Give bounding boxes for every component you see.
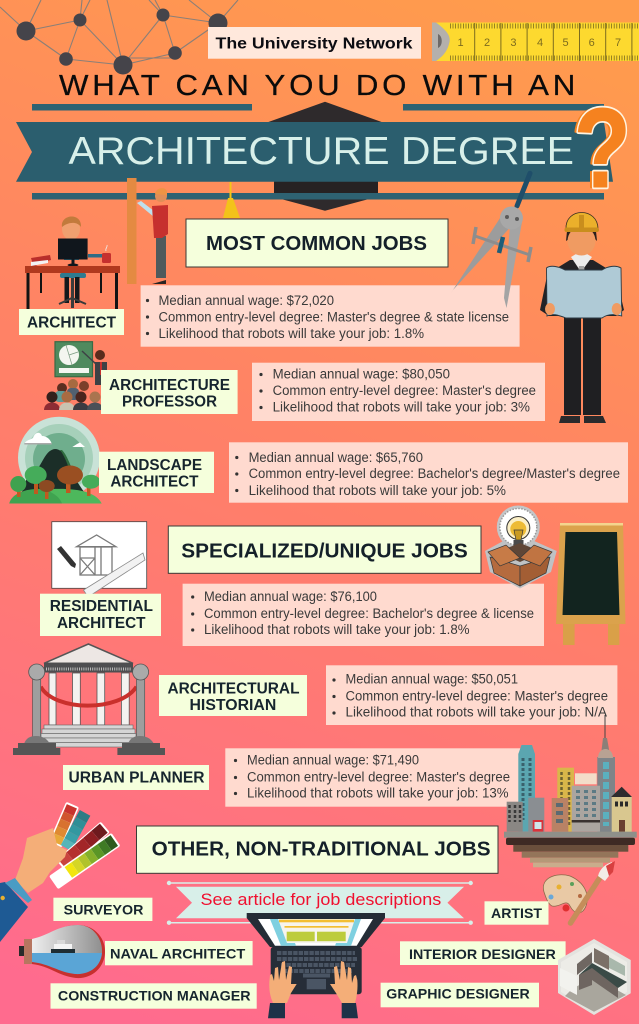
panel: landscape stats: Common entry-level degree: Bachelor's degree/Master's degree	[249, 466, 620, 481]
panel: historian stats: Common entry-level degree: Master's degree	[346, 688, 608, 703]
panel: urban planner stats: Likelihood that robots will take your job: 13%	[247, 785, 509, 800]
label: urban planner: URBAN PLANNER	[68, 770, 204, 787]
label: naval architect	[105, 941, 253, 965]
panel: architect stats	[141, 285, 520, 347]
label: architect: ARCHITECT	[27, 315, 117, 332]
icon: house drawing	[52, 522, 147, 597]
label: interior designer	[400, 941, 566, 965]
icon: measuring tape: 4	[537, 37, 543, 49]
panel: architect stats: Likelihood that robots will take your job: 1.8%	[158, 326, 424, 341]
label: architect	[19, 309, 124, 335]
label: architectural historian: HISTORIAN	[190, 697, 276, 714]
icon: measuring tape	[432, 22, 639, 61]
label: landscape architect: ARCHITECT	[110, 474, 199, 491]
panel: residential stats: Median annual wage: $76,100	[204, 589, 377, 604]
icon: measuring tape: 6	[589, 37, 595, 49]
section heading: most common jobs	[186, 219, 448, 267]
icon: chalkboard	[556, 523, 626, 645]
title banner: ARCHITECTURE DEGREE	[68, 130, 574, 173]
panel: urban planner stats	[225, 748, 520, 807]
panel: urban planner stats: Common entry-level degree: Master's degree	[247, 769, 510, 784]
icon: measuring tape: 5	[563, 37, 569, 49]
panel: professor stats	[252, 363, 545, 421]
panel: residential stats: Likelihood that robots will take your job: 1.8%	[204, 622, 470, 637]
icon: hand with colour swatches	[0, 802, 121, 942]
decorative bars	[32, 104, 604, 200]
icon: question mark: ?	[574, 84, 631, 211]
label: landscape architect	[99, 452, 214, 493]
label: architecture professor: PROFESSOR	[122, 394, 217, 411]
label: graphic designer: GRAPHIC DESIGNER	[386, 985, 530, 1001]
label: naval architect: NAVAL ARCHITECT	[110, 945, 246, 961]
label: construction manager: CONSTRUCTION MANAGER	[58, 988, 251, 1004]
icon: graduation cap	[260, 102, 390, 211]
title banner	[16, 122, 613, 182]
label: architectural historian	[159, 675, 307, 716]
label: surveyor: SURVEYOR	[64, 902, 143, 918]
label: residential architect	[40, 594, 161, 636]
icon: architect at desk	[25, 216, 120, 309]
brand label	[208, 27, 421, 59]
panel: urban planner stats: Median annual wage: $71,490	[247, 752, 419, 767]
icon: palette and brush	[543, 861, 615, 923]
panel: professor stats: Common entry-level degree: Master's degree	[273, 383, 536, 398]
section heading: most common jobs: MOST COMMON JOBS	[206, 233, 427, 255]
ribbon: article note	[167, 881, 473, 925]
panel: professor stats: Likelihood that robots will take your job: 3%	[273, 400, 530, 415]
icon: measuring tape: 7	[615, 37, 621, 49]
label: architectural historian: ARCHITECTURAL	[168, 680, 300, 697]
icon: idea box	[485, 506, 557, 588]
icon: measuring tape: 1	[457, 37, 464, 49]
icon: floating city	[504, 715, 637, 867]
label: graphic designer	[381, 983, 539, 1007]
label: residential architect: ARCHITECT	[57, 615, 146, 632]
panel: residential stats: Common entry-level degree: Bachelor's degree & license	[204, 606, 534, 621]
icon: measuring tape: 3	[510, 37, 516, 49]
label: urban planner	[63, 765, 209, 790]
icon: engineer with blueprint	[540, 212, 624, 423]
label: interior designer: INTERIOR DESIGNER	[409, 946, 556, 962]
icon: compass	[451, 173, 531, 308]
icon: ship light bulb	[19, 925, 105, 978]
icon: measuring tape: 2	[484, 37, 490, 49]
section heading: specialized jobs	[168, 526, 481, 573]
panel: architect stats: Common entry-level degree: Master's degree & state license	[158, 309, 509, 324]
brand label: The University Network	[216, 36, 413, 52]
panel: architect stats: Median annual wage: $72,020	[158, 293, 334, 308]
icon: question mark: ?	[571, 84, 628, 211]
icon: tassel	[223, 182, 240, 218]
panel: historian stats: Likelihood that robots will take your job: N/A	[346, 705, 607, 720]
icon: professor and audience	[44, 342, 107, 410]
icon: laptop with hands	[247, 913, 385, 1018]
label: architecture professor: ARCHITECTURE	[109, 377, 230, 394]
panel: residential stats	[183, 584, 544, 646]
section heading: other jobs	[136, 826, 498, 873]
icon: worker with measuring staff	[127, 178, 168, 284]
label: surveyor	[53, 898, 152, 921]
icon: question mark: ?	[574, 84, 631, 211]
label: construction manager	[50, 983, 257, 1009]
label: landscape architect: LANDSCAPE	[107, 457, 202, 474]
icon: molecular network	[0, 0, 238, 74]
panel: landscape stats: Median annual wage: $65,760	[249, 450, 423, 465]
label: artist: ARTIST	[491, 905, 542, 921]
panel: landscape stats: Likelihood that robots will take your job: 5%	[249, 483, 506, 498]
section heading: specialized jobs: SPECIALIZED/UNIQUE JOBS	[181, 540, 468, 562]
panel: historian stats	[326, 665, 617, 725]
label: artist	[484, 901, 548, 925]
title line: WHAT CAN YOU DO WITH AN	[59, 70, 579, 102]
panel: landscape stats	[229, 442, 628, 503]
label: architecture professor	[101, 370, 238, 414]
icon: temple	[13, 644, 165, 755]
icon: kitchen hexagon	[558, 939, 631, 1015]
section heading: other jobs: OTHER, NON-TRADITIONAL JOBS	[152, 839, 491, 861]
panel: historian stats: Median annual wage: $50,051	[346, 672, 518, 687]
ribbon: article note: See article for job descriptions	[200, 891, 441, 909]
label: residential architect: RESIDENTIAL	[50, 598, 153, 615]
icon: landscape	[9, 417, 102, 504]
panel: professor stats: Median annual wage: $80,050	[273, 367, 450, 382]
